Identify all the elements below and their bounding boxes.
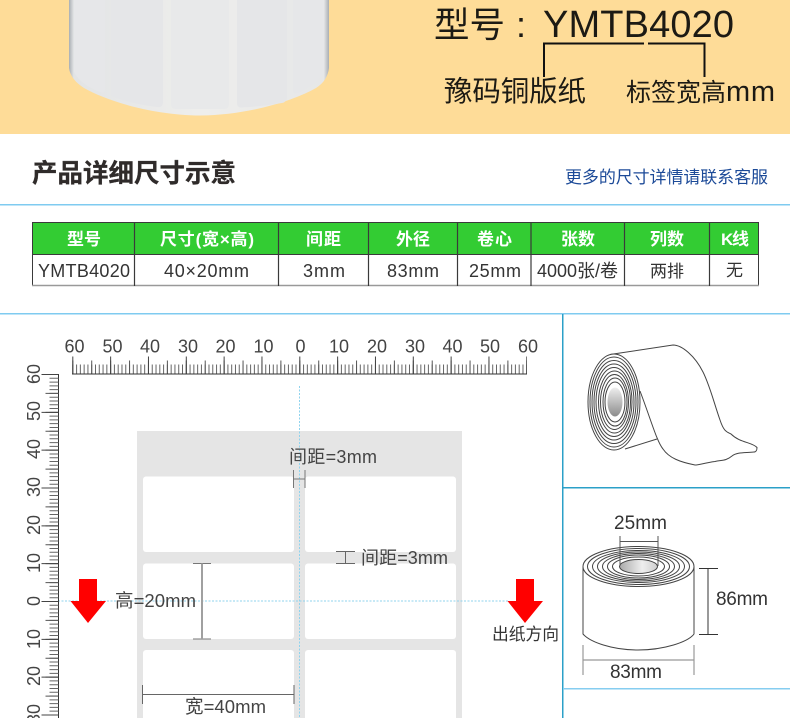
label size caption	[626, 76, 775, 108]
table header row: 外径	[396, 230, 430, 249]
top banner background	[0, 0, 790, 134]
paper type caption: 豫码铜版纸	[444, 76, 586, 108]
height dimension: 高=20mm	[115, 590, 196, 611]
icon: right red arrow	[508, 579, 543, 623]
table header row: 卷心	[477, 230, 512, 249]
horizontal ruler numbers: 30	[178, 336, 198, 356]
width dimension	[142, 685, 294, 717]
product photo: label roll	[69, 0, 329, 116]
horizontal ruler numbers: 20	[367, 336, 387, 356]
height dimension	[699, 568, 768, 634]
vertical ruler numbers: 20	[24, 666, 44, 686]
feed direction caption: 出纸方向	[492, 625, 559, 644]
vertical ruler numbers	[24, 364, 44, 718]
vertical ruler numbers: 40	[24, 439, 44, 459]
divider above diagrams	[0, 313, 790, 314]
section heading: 产品详细尺寸示意	[32, 159, 236, 188]
horizontal gap dimension	[289, 447, 377, 488]
table data row: 4000张/卷	[537, 261, 618, 281]
label size caption: mm	[726, 76, 775, 108]
table header row	[67, 229, 749, 249]
horizontal ruler numbers: 60	[64, 336, 85, 356]
horizontal ruler numbers: 30	[405, 336, 425, 356]
roll body	[583, 546, 694, 650]
horizontal ruler numbers: 50	[102, 336, 123, 356]
table data row: 3mm	[303, 261, 345, 281]
customer service note: 更多的尺寸详情请联系客服	[565, 168, 768, 187]
vertical ruler numbers: 0	[24, 596, 44, 606]
icon: left red arrow	[70, 579, 106, 623]
model number heading: 型号	[434, 5, 505, 45]
table data row: 两排	[650, 262, 684, 281]
table header row: 列数	[650, 230, 684, 249]
vertical ruler numbers: 30	[24, 477, 44, 497]
table header row: 型号	[67, 230, 101, 249]
label sheet	[137, 431, 462, 718]
horizontal ruler numbers: 60	[518, 336, 538, 356]
horizontal ruler	[64, 336, 538, 374]
model number heading: YMTB4020	[543, 4, 734, 46]
table data row: YMTB4020	[38, 261, 130, 281]
vertical ruler numbers: 10	[24, 629, 44, 649]
model number heading: :	[516, 4, 526, 45]
horizontal ruler numbers: 50	[480, 336, 500, 356]
table data row	[38, 261, 743, 281]
vertical ruler	[24, 364, 58, 718]
table header row: 张数	[561, 230, 595, 249]
roll core	[608, 388, 622, 416]
vertical ruler numbers: 10	[24, 553, 44, 573]
center guide lines	[58, 386, 508, 718]
illustration: roll with dimensions	[583, 513, 768, 683]
panel dividers on the right	[562, 314, 790, 718]
horizontal ruler numbers	[64, 336, 538, 356]
model code bracket lines	[544, 44, 704, 77]
height dimension	[115, 564, 211, 639]
model number heading	[434, 4, 734, 46]
vertical gap dimension: 间距=3mm	[361, 548, 448, 568]
height dimension: 86mm	[716, 589, 768, 610]
divider below heading	[0, 204, 790, 206]
outer diameter dimension	[583, 645, 694, 683]
vertical ruler numbers: 60	[24, 364, 44, 384]
horizontal ruler numbers: 40	[442, 336, 463, 356]
table header row: K线	[721, 230, 749, 249]
table data row: 83mm	[387, 261, 439, 281]
specification table	[32, 222, 759, 286]
table data row: 40×20mm	[164, 261, 249, 281]
horizontal ruler numbers: 0	[295, 336, 306, 356]
horizontal gap dimension: 间距=3mm	[289, 447, 377, 467]
label size caption: 标签宽高	[626, 79, 726, 107]
table data row: 无	[726, 261, 743, 280]
core diameter dimension: 25mm	[614, 513, 667, 534]
horizontal ruler numbers: 20	[215, 336, 236, 356]
vertical ruler numbers: 50	[24, 401, 44, 421]
horizontal ruler numbers: 10	[329, 336, 349, 356]
core diameter dimension	[614, 513, 667, 566]
illustration: unrolled label roll	[588, 345, 757, 465]
table data row: 25mm	[469, 261, 521, 281]
vertical ruler numbers: 20	[24, 515, 44, 535]
width dimension: 宽=40mm	[185, 696, 266, 717]
table header row: 尺寸(宽×高)	[160, 229, 254, 249]
outer diameter dimension: 83mm	[610, 662, 662, 683]
horizontal ruler numbers: 10	[253, 336, 274, 356]
horizontal ruler numbers: 40	[140, 336, 160, 356]
table header row: 间距	[306, 230, 341, 249]
